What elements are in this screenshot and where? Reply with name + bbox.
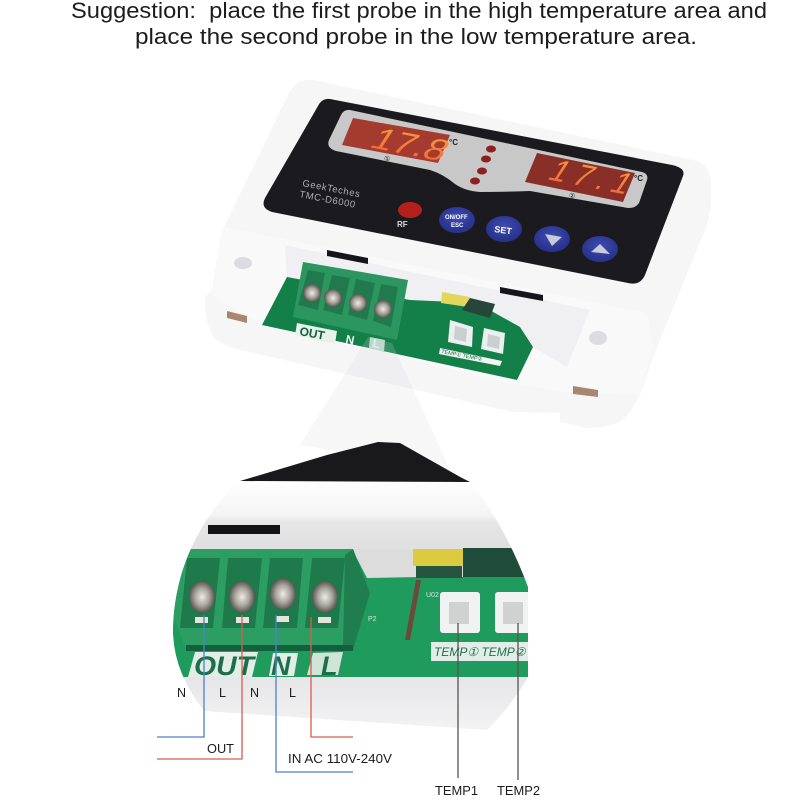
wire labels — [177, 686, 540, 798]
PCB labels — [188, 652, 343, 677]
TEMP2 wire — [517, 623, 519, 780]
board markings: U02 — [426, 592, 439, 599]
black panel — [264, 99, 684, 284]
screw clamps — [195, 616, 331, 623]
terminal block — [173, 549, 370, 651]
degree labels: °C — [449, 138, 458, 147]
brand text — [298, 178, 361, 211]
body wall — [191, 506, 526, 580]
PCB labels: L — [371, 336, 381, 351]
wire labels: N — [250, 686, 259, 700]
PCB labels: OUT — [298, 324, 327, 343]
status LEDs — [470, 146, 496, 184]
buttons — [439, 207, 618, 262]
right reading: 17.1 — [542, 154, 641, 200]
display index marks: ② — [569, 192, 575, 200]
wire labels: L — [289, 686, 296, 700]
transformer — [441, 292, 470, 307]
display index marks: ① — [384, 155, 390, 163]
device photo — [205, 80, 711, 428]
black sliver — [240, 442, 470, 482]
terminal pockets — [298, 270, 398, 327]
screws — [303, 284, 392, 318]
temp labels: TEMP① TEMP② — [441, 348, 483, 363]
PCB labels: N — [271, 651, 291, 681]
temp labels — [431, 642, 531, 661]
terminal block — [293, 262, 408, 340]
zoomed detail — [172, 506, 528, 730]
temp connectors — [448, 320, 505, 354]
buttons: ESC — [451, 223, 464, 229]
input live wire — [311, 617, 353, 737]
temp connectors — [440, 592, 530, 633]
temp labels: TEMP① TEMP② — [434, 645, 527, 659]
temp labels — [439, 348, 502, 366]
OUT live wire — [157, 615, 242, 759]
buttons: SET — [494, 224, 513, 236]
device front face — [212, 227, 653, 395]
wire labels: TEMP1 — [435, 784, 478, 798]
device silhouette — [205, 80, 711, 428]
lower body — [184, 677, 528, 730]
terminal base — [186, 645, 353, 651]
screws — [189, 578, 338, 613]
RF button: RF — [397, 220, 408, 229]
wire labels: TEMP2 — [497, 784, 540, 798]
wire labels: OUT — [207, 742, 234, 756]
copper feet — [227, 311, 598, 397]
wire labels: IN AC 110V-240V — [288, 752, 393, 766]
board markings — [368, 592, 439, 623]
TEMP1 wire — [457, 623, 459, 778]
PCB — [170, 552, 530, 678]
brand text: GeekTeches — [301, 178, 361, 200]
connector pockets — [454, 326, 500, 349]
slot — [208, 525, 280, 534]
wire labels: N — [177, 686, 186, 700]
right display — [525, 153, 635, 202]
title — [71, 0, 767, 49]
transformer — [413, 549, 463, 566]
holes — [234, 257, 607, 345]
RF button — [397, 202, 422, 229]
buttons: ON/OFF — [445, 215, 468, 221]
OUT neutral wire — [157, 615, 204, 737]
degree labels: °C — [634, 174, 643, 183]
PCB labels: OUT — [194, 651, 257, 681]
terminal pockets — [180, 558, 345, 628]
PCB labels — [295, 323, 385, 352]
PCB — [262, 277, 533, 380]
title: place the second probe in the low temperature area. — [135, 24, 697, 49]
wire labels: L — [219, 686, 226, 700]
input neutral wire — [276, 615, 353, 772]
magnifier cone — [300, 337, 450, 470]
slots — [327, 250, 543, 301]
connector pockets — [449, 602, 523, 624]
display index marks — [384, 155, 575, 200]
wires — [157, 615, 518, 780]
opening wall — [285, 245, 590, 367]
left reading: 17.8 — [364, 122, 457, 167]
terminal right face — [343, 549, 370, 650]
components — [463, 548, 528, 577]
left display — [342, 118, 450, 163]
gray display plate — [328, 110, 647, 208]
PCB labels: L — [321, 651, 338, 681]
wall overhang — [354, 552, 416, 578]
board stripe — [405, 580, 421, 640]
brand text: TMC-D6000 — [298, 189, 357, 211]
board markings: P2 — [368, 616, 377, 623]
degree labels — [449, 138, 643, 183]
PCB labels: N — [344, 332, 356, 348]
